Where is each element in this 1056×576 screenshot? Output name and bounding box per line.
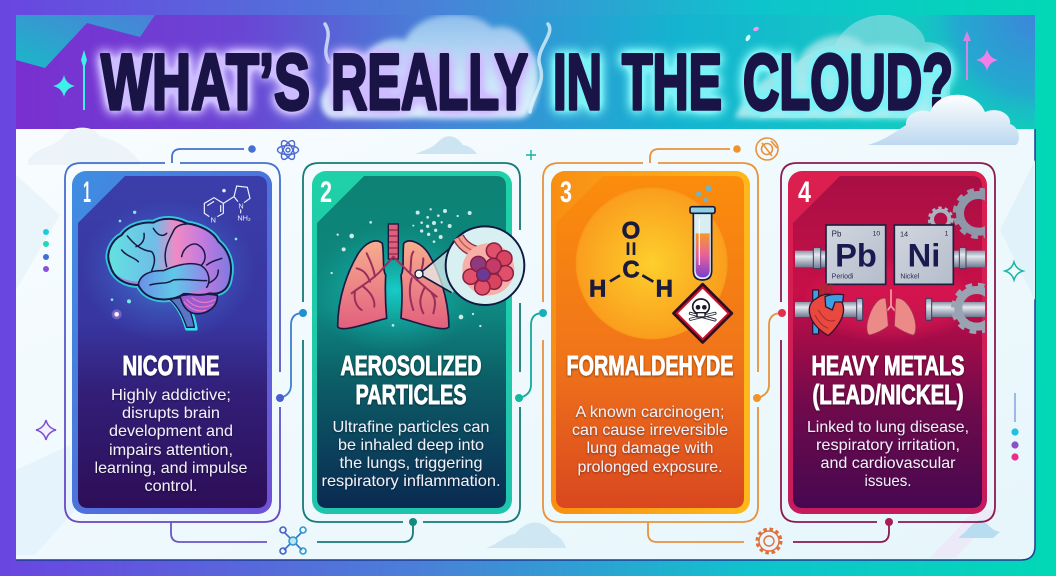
icon: formaldehyde structure: H xyxy=(656,276,673,303)
text: formaldehyde description: can cause irreversible xyxy=(572,422,728,439)
card 3 inner xyxy=(556,176,744,508)
text: nicotine description: disrupts brain xyxy=(122,405,220,422)
icon: purple outline star xyxy=(36,420,56,440)
text: formaldehyde description: prolonged exposure. xyxy=(578,459,722,476)
icon: plus xyxy=(526,150,536,160)
heading: heavy metals: HEAVY METALS xyxy=(812,350,964,381)
heading: heavy metals xyxy=(812,350,964,410)
icon: orange ring xyxy=(756,138,778,160)
text: heavy metals description: respiratory irritation, xyxy=(816,437,960,454)
icon: nicotine molecule: N xyxy=(238,202,244,211)
cloud: white foreground right xyxy=(868,95,1019,145)
header band xyxy=(16,14,1035,129)
card 4 glow xyxy=(810,264,970,336)
text: nicotine description xyxy=(94,387,248,495)
card 2 body xyxy=(312,171,512,514)
card 2 outline xyxy=(303,163,520,522)
text: nicotine description: Highly addictive; xyxy=(111,387,231,404)
icon: heart xyxy=(809,283,844,336)
icon: element tile lead xyxy=(826,225,886,284)
text: heavy metals description xyxy=(807,419,969,490)
panel: card 1 nicotine: 1 xyxy=(83,176,91,209)
title: WHAT’S xyxy=(101,37,310,126)
text: heavy metals description: issues. xyxy=(864,473,912,490)
icon: element tile lead: Pb xyxy=(832,230,842,239)
text: particles description: be inhaled deep into xyxy=(338,437,484,454)
card 4 body xyxy=(788,171,987,514)
text: nicotine description: development and xyxy=(109,423,233,440)
text: nicotine description: learning, and impulse xyxy=(94,460,248,477)
icon: toxic hazard diamond xyxy=(674,284,732,342)
heading: heavy metals: (LEAD/NICKEL) xyxy=(812,379,964,410)
card 1 body xyxy=(72,171,272,514)
icon: teal outline star xyxy=(1005,262,1023,280)
card 2 glow xyxy=(310,225,480,355)
icon: element tile nickel xyxy=(894,225,953,284)
icon: nicotine molecule: N xyxy=(211,215,216,224)
heading: aerosolized particles: AEROSOLIZED xyxy=(340,350,482,381)
panel: card 1 nicotine xyxy=(65,163,280,522)
icon: nicotine molecule xyxy=(204,186,251,224)
card 3 outline xyxy=(543,163,758,522)
card 2 inner xyxy=(317,176,506,508)
panel: card 4 heavy metals xyxy=(781,163,1002,522)
icon: element tile nickel: Ni xyxy=(908,237,940,274)
number 2: 2 xyxy=(320,176,332,209)
smoke wisps xyxy=(325,24,550,112)
text: formaldehyde description: A known carcinogen; xyxy=(576,404,724,421)
card 4 outline xyxy=(781,163,995,522)
panel: card 2 aerosolized particles xyxy=(303,163,524,522)
card 1 outline xyxy=(65,163,280,522)
text: heavy metals description: and cardiovascular xyxy=(820,455,956,472)
icon: formaldehyde structure: C xyxy=(622,257,640,284)
icon: dots left xyxy=(43,229,49,272)
title: IN xyxy=(553,37,602,126)
illustration: pipes and gears xyxy=(795,190,1002,332)
panel: card 3 formaldehyde xyxy=(543,163,758,522)
icon: formaldehyde structure: H xyxy=(589,276,606,303)
text: nicotine description: control. xyxy=(144,478,198,495)
icon: element tile nickel: Nickel xyxy=(900,273,920,280)
number 4: 4 xyxy=(798,176,811,209)
icon: element tile lead: 10 xyxy=(873,230,880,237)
icon: formaldehyde structure xyxy=(576,187,728,339)
icon: dots right xyxy=(1011,393,1019,461)
connectors between cards xyxy=(171,145,893,542)
number 3: 3 xyxy=(560,176,572,209)
icon: small lungs xyxy=(867,289,916,335)
heading: formaldehyde: FORMALDEHYDE xyxy=(566,350,734,381)
text: particles description xyxy=(322,419,500,490)
text: heavy metals description: Linked to lung disease, xyxy=(807,419,969,436)
text: particles description: respiratory inflammation. xyxy=(322,473,500,490)
heading: aerosolized particles xyxy=(340,350,482,410)
card 1 glow xyxy=(80,198,256,342)
text: formaldehyde description: lung damage with xyxy=(586,440,714,457)
title xyxy=(101,37,953,126)
title: THE xyxy=(622,37,722,126)
card 1 inner xyxy=(78,176,267,508)
icon: network nodes xyxy=(280,527,306,554)
icon: nicotine molecule: NH₂ xyxy=(237,214,251,223)
main light panel xyxy=(16,129,1035,560)
card 4 inner xyxy=(793,176,982,508)
cloud behind title xyxy=(321,14,539,118)
title: REALLY xyxy=(331,37,528,126)
icon: element tile lead: Pb xyxy=(835,237,877,274)
icon: gear xyxy=(757,529,781,553)
icon: element tile nickel: 1 xyxy=(945,230,949,237)
clouds on panel xyxy=(28,128,1000,548)
icon: element tile nickel: 14 xyxy=(900,230,908,239)
icon: test tube xyxy=(690,185,715,280)
text: formaldehyde description xyxy=(572,404,728,476)
icon: lungs with magnified alveoli xyxy=(330,208,524,329)
card 3 body xyxy=(551,171,750,514)
bubbles above title xyxy=(745,26,760,42)
text: nicotine description: impairs attention, xyxy=(109,442,233,459)
text: particles description: Ultrafine particles can xyxy=(332,419,490,436)
icon: formaldehyde structure: O xyxy=(622,217,640,244)
icon: atom xyxy=(278,139,298,161)
cloud behind question xyxy=(760,15,951,118)
heading: nicotine: NICOTINE xyxy=(122,350,220,381)
text: particles description: the lungs, triggering xyxy=(340,455,482,472)
icon: element tile lead: Periodi xyxy=(832,273,854,280)
star: pink sparkle right xyxy=(963,31,998,80)
heading: aerosolized particles: PARTICLES xyxy=(356,379,466,410)
star: cyan sparkle left xyxy=(53,50,87,110)
icon: brain xyxy=(107,211,237,329)
